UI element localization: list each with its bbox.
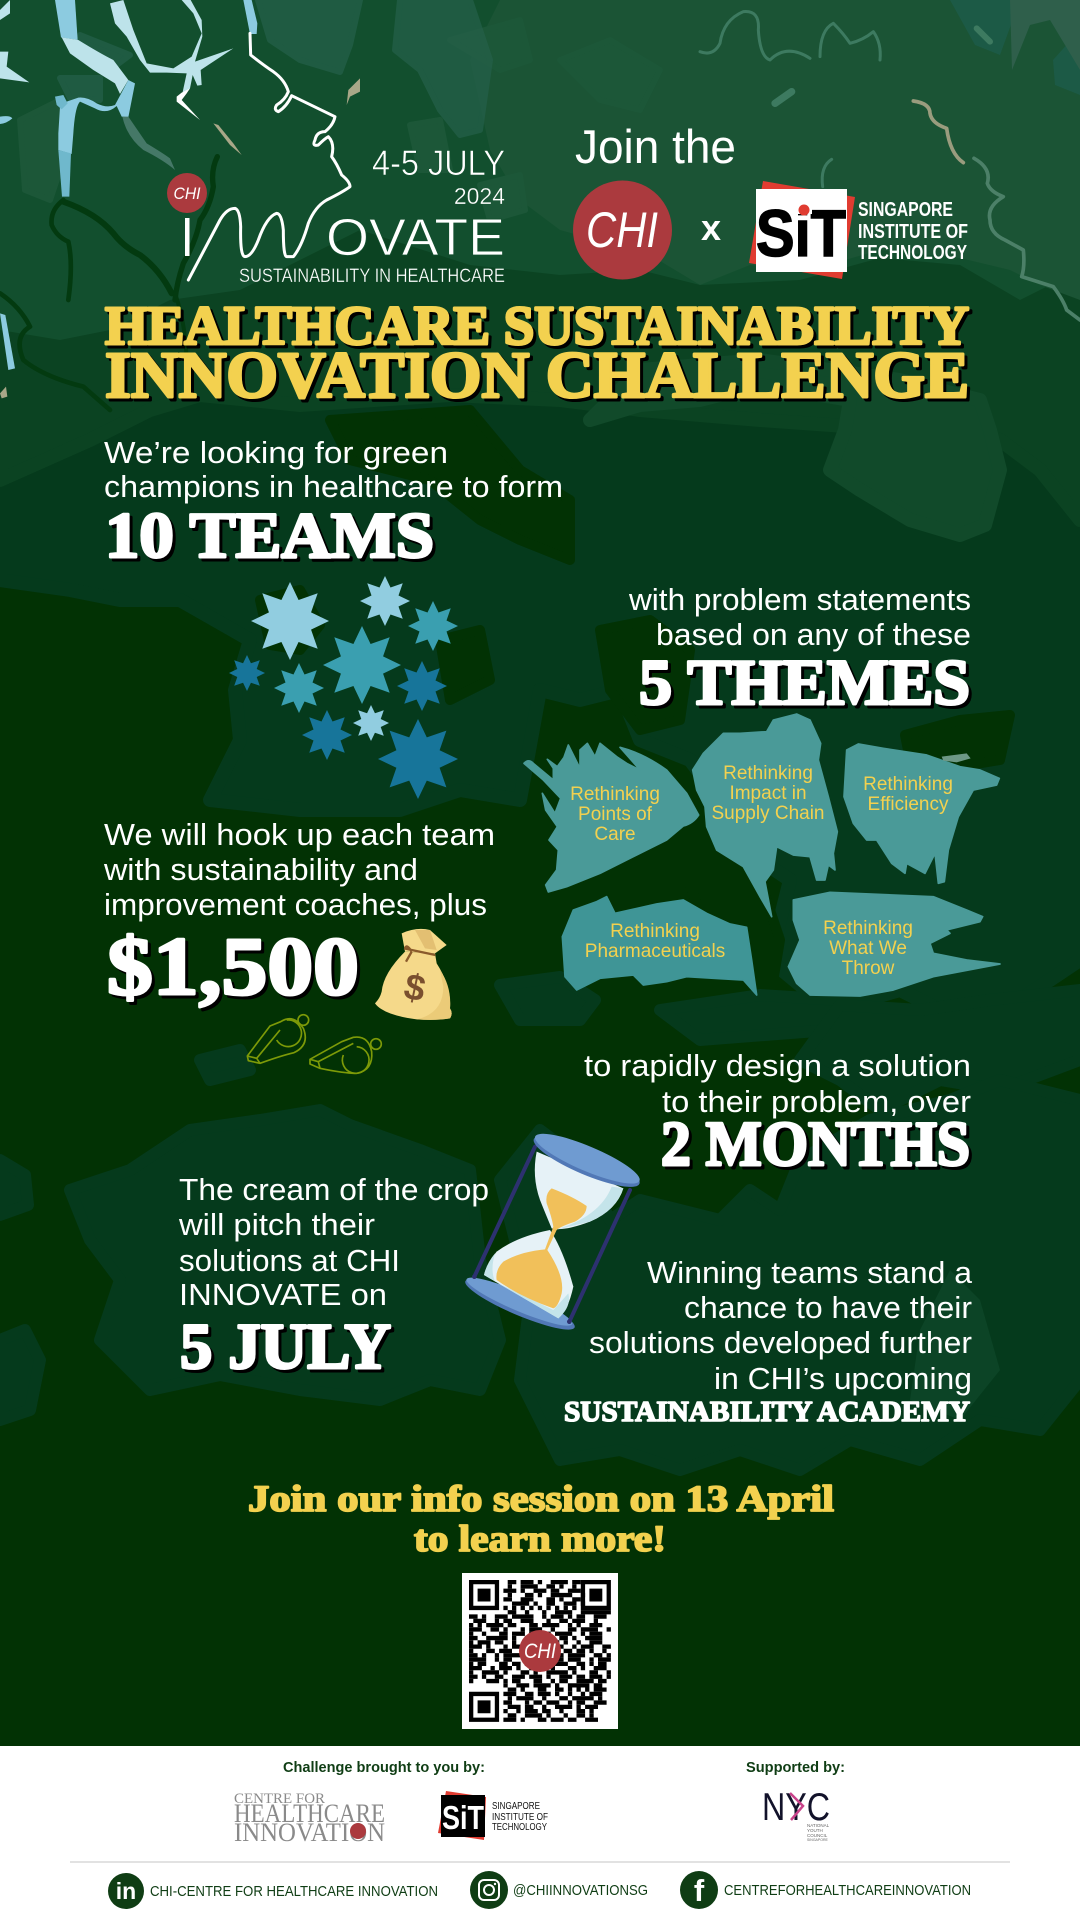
2 months: 2 MONTHS <box>661 1109 970 1179</box>
pitch text: will pitch their <box>178 1207 375 1242</box>
winners text: Winning teams stand a <box>647 1255 973 1290</box>
NYC logo <box>762 1786 830 1842</box>
theme: what we throw: What We <box>829 938 907 959</box>
divider <box>70 1861 1010 1863</box>
small SiT logo: INSTITUTE OF <box>492 1812 548 1823</box>
SiT logo: SiT <box>756 196 846 270</box>
QR code <box>462 1573 618 1729</box>
QR code: CHI <box>524 1640 556 1663</box>
winners text <box>589 1255 973 1396</box>
dark rivers <box>0 157 217 410</box>
themes intro text: based on any of these <box>656 617 971 652</box>
theme: supply chain: Impact in <box>729 783 807 804</box>
small SiT logo: SINGAPORE <box>492 1801 540 1812</box>
lighter land patches <box>20 20 660 220</box>
CHI Innovate logo <box>167 33 505 287</box>
NYC logo: NATIONAL <box>807 1823 830 1828</box>
NYC logo: YOUTH <box>807 1828 823 1833</box>
theme: efficiency: Rethinking <box>863 774 953 795</box>
join the: Join the <box>575 120 736 173</box>
winners text: chance to have their <box>684 1290 972 1325</box>
coaches text: We will hook up each team <box>104 817 495 852</box>
logo I letter <box>185 218 190 256</box>
whistle one <box>247 1015 309 1063</box>
CHI wordmark <box>234 1791 385 1847</box>
CHI logo circle: CHI <box>586 202 658 258</box>
CHI wordmark: CENTRE FOR <box>234 1791 325 1807</box>
design text: to rapidly design a solution <box>584 1048 971 1083</box>
theme: points of care: Points of <box>578 804 653 825</box>
theme: supply chain: Rethinking <box>723 763 813 784</box>
SiT logo: SINGAPORE <box>858 199 953 221</box>
theme: what we throw: Throw <box>842 958 895 979</box>
faint wiggly rivers right <box>700 12 1080 320</box>
icon: money bag: $ <box>401 965 429 1010</box>
coaches text: improvement coaches, plus <box>104 887 487 922</box>
logo ovate: OVATE <box>326 209 505 267</box>
footer panel <box>0 1746 1080 1920</box>
theme blob shapes <box>524 714 1000 996</box>
facebook contact <box>680 1871 971 1909</box>
main title <box>105 295 969 412</box>
CHI logo circle <box>573 180 672 280</box>
facebook contact: CENTREFORHEALTHCAREINNOVATION <box>724 1882 971 1899</box>
10 teams: 10 TEAMS <box>105 500 434 572</box>
coaches text <box>103 817 495 922</box>
winners text: solutions developed further <box>589 1325 972 1360</box>
facebook contact: f <box>694 1873 705 1908</box>
theme: what we throw: Rethinking <box>823 918 913 939</box>
theme blobs <box>524 714 1000 996</box>
icon: whistles <box>247 1015 381 1073</box>
small SiT logo: TECHNOLOGY <box>492 1822 547 1833</box>
icon: hourglass <box>461 1125 645 1338</box>
NYC logo: SINGAPORE <box>807 1838 828 1842</box>
SiT logo: INSTITUTE OF <box>858 221 968 243</box>
intro text: We’re looking for green <box>104 435 448 470</box>
icon: money bag <box>375 929 452 1020</box>
small SiT logo: SiT <box>442 1799 484 1836</box>
logo small CHI badge <box>167 173 207 213</box>
info session call to action: to learn more! <box>414 1519 666 1560</box>
info session call to action <box>248 1479 834 1560</box>
SiT logo <box>749 181 968 279</box>
whistle two <box>310 1037 381 1073</box>
prize amount: $1,500 <box>107 920 359 1012</box>
themes intro text: with problem statements <box>628 582 971 617</box>
pitch text: solutions at CHI <box>179 1243 400 1278</box>
linkedin contact: CHI-CENTRE FOR HEALTHCARE INNOVATION <box>150 1883 438 1900</box>
upper mid band <box>0 340 1080 1010</box>
CHI wordmark: INNOVATION <box>234 1818 385 1847</box>
intro text: champions in healthcare to form <box>104 469 563 504</box>
pitch text <box>178 1172 489 1312</box>
pitch text: INNOVATE on <box>179 1277 387 1312</box>
instagram contact <box>470 1871 648 1909</box>
design text <box>584 1048 971 1119</box>
theme: efficiency: Efficiency <box>868 794 949 815</box>
supporters heading: Supported by: <box>746 1760 845 1776</box>
sustainability academy: SUSTAINABILITY ACADEMY <box>564 1397 970 1428</box>
linkedin contact <box>108 1873 438 1909</box>
SiT logo: TECHNOLOGY <box>858 242 968 264</box>
theme: pharmaceuticals: Pharmaceuticals <box>585 941 725 962</box>
partners heading: Challenge brought to you by: <box>283 1760 485 1776</box>
winners text: in CHI’s upcoming <box>714 1361 972 1396</box>
times x: x <box>701 207 721 248</box>
NYC logo: COUNCIL <box>807 1833 828 1838</box>
intro text <box>104 435 563 504</box>
light rivers top left <box>0 0 360 398</box>
logo face and squiggle line <box>188 33 350 280</box>
NYC logo: NYC <box>762 1786 830 1829</box>
main title: INNOVATION CHALLENGE <box>105 339 969 412</box>
logo tagline: SUSTAINABILITY IN HEALTHCARE <box>239 266 505 287</box>
linkedin contact: in <box>116 1878 136 1904</box>
theme: supply chain: Supply Chain <box>711 803 825 824</box>
5 july: 5 JULY <box>180 1311 391 1383</box>
theme: pharmaceuticals: Rethinking <box>610 921 700 942</box>
theme: points of care: Rethinking <box>570 784 660 805</box>
main title: HEALTHCARE SUSTAINABILITY <box>105 295 969 356</box>
logo small CHI badge: CHI <box>174 184 201 203</box>
5 themes: 5 THEMES <box>639 647 970 719</box>
design text: to their problem, over <box>662 1084 971 1119</box>
themes intro text <box>628 582 971 652</box>
instagram contact: @CHIINNOVATIONSG <box>513 1882 648 1899</box>
logo date: 4-5 JULY <box>372 144 505 183</box>
small SiT logo <box>438 1791 548 1840</box>
coaches text: with sustainability and <box>103 852 418 887</box>
theme: points of care: Care <box>594 824 636 845</box>
CHI wordmark: HEALTHCARE <box>234 1799 385 1828</box>
stars cluster <box>229 576 458 799</box>
logo year: 2024 <box>454 183 505 209</box>
info session call to action: Join our info session on 13 April <box>248 1479 834 1520</box>
pitch text: The cream of the crop <box>179 1172 489 1207</box>
